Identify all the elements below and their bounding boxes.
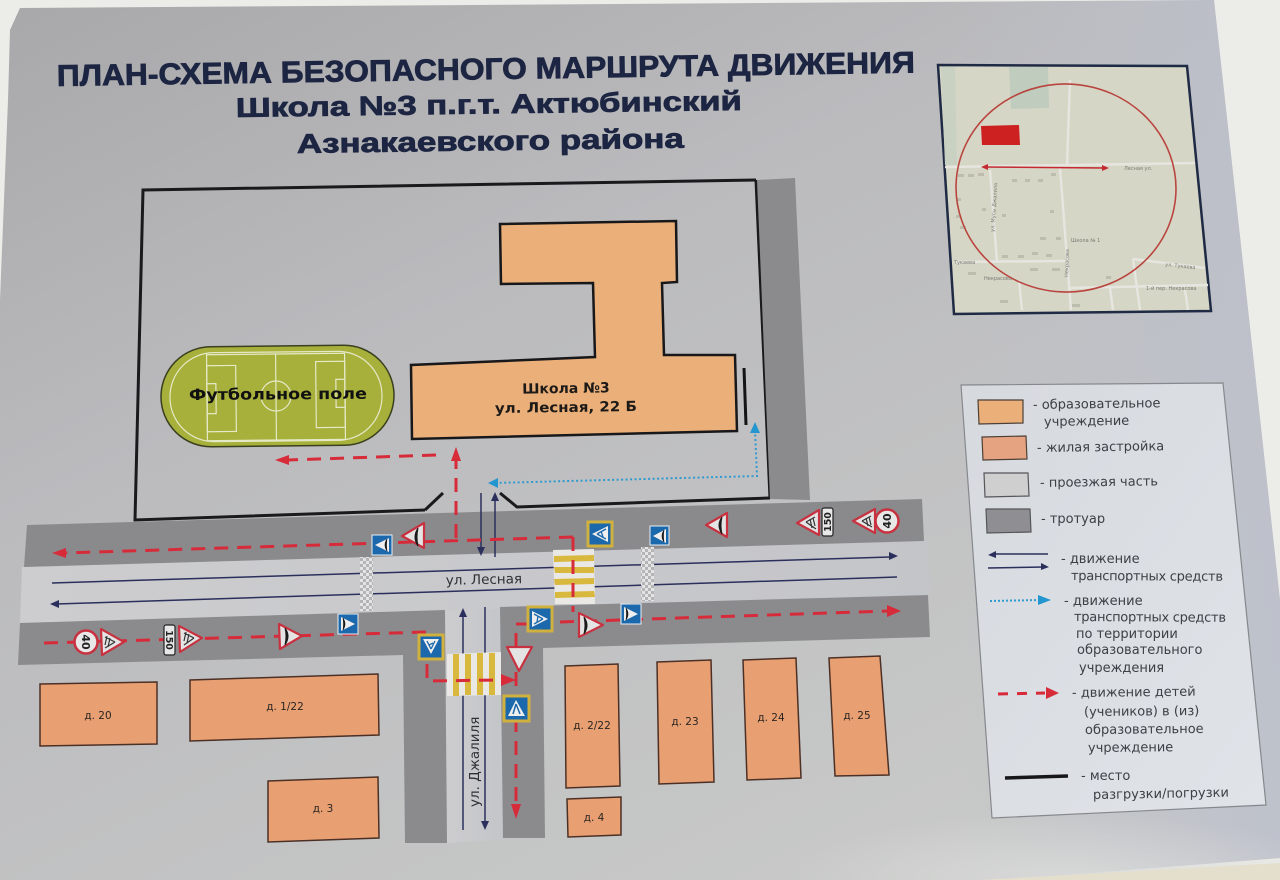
legend: educational institution: - образовательное bbox=[1033, 396, 1161, 413]
legend: children movement: образовательное bbox=[1085, 722, 1204, 738]
residential houses bbox=[40, 656, 889, 842]
route: lower right sidewalk bbox=[560, 605, 901, 622]
legend: vehicle traffic on site: - движение bbox=[1064, 594, 1143, 609]
house 1/22 bbox=[190, 674, 379, 741]
route: lower left sidewalk bbox=[44, 632, 427, 643]
football field bbox=[160, 345, 395, 447]
sign: children 150: 150 bbox=[823, 512, 834, 532]
legend: loading place: - место bbox=[1081, 769, 1130, 784]
gate inbound bbox=[477, 493, 485, 556]
legend: loading place bbox=[1005, 769, 1229, 803]
house 4: д. 4 bbox=[584, 812, 605, 824]
school territory outline bbox=[135, 180, 770, 520]
house 24 bbox=[743, 658, 801, 780]
map house marks bbox=[956, 173, 1111, 307]
street label Dzhalilya: ул. Джалиля bbox=[467, 717, 483, 807]
children route bbox=[44, 447, 901, 819]
road: ул. Джалиля bbox=[444, 604, 503, 843]
sign: blue lower east bbox=[621, 604, 641, 624]
legend: roadway: - проезжая часть bbox=[1040, 474, 1158, 491]
zebra crossing Lesnaya bbox=[553, 549, 595, 604]
house 24: д. 24 bbox=[757, 712, 785, 724]
legend: sidewalk bbox=[986, 509, 1105, 533]
Lesnaya westbound bbox=[50, 577, 897, 608]
route: crossing Dzhalilya bbox=[427, 664, 516, 686]
sign: blue lower west bbox=[338, 614, 358, 634]
Dzhalilya southbound bbox=[481, 607, 489, 830]
title line 2: Школа №3 п.г.т. Актюбинский bbox=[236, 86, 742, 123]
sign: 150 west: 150 bbox=[163, 630, 174, 650]
route arrow bbox=[981, 164, 1109, 171]
legend: vehicle traffic on site bbox=[990, 594, 1226, 676]
sign: 40 west: 40 bbox=[79, 634, 92, 650]
legend: vehicle traffic: - движение bbox=[1061, 552, 1140, 567]
inset location map bbox=[938, 65, 1211, 314]
vehicle route inside school bbox=[488, 422, 760, 488]
map labels: Школа № 1 bbox=[1071, 238, 1100, 244]
legend: vehicle traffic on site: по территории bbox=[1076, 627, 1178, 642]
house 2/22 bbox=[565, 664, 620, 788]
sign: children 150 bbox=[797, 508, 834, 536]
map labels: ул. Тукаева bbox=[1165, 262, 1196, 271]
sign: yellow crossing east bbox=[528, 607, 552, 631]
legend: vehicle traffic on site: учреждения bbox=[1079, 661, 1164, 676]
house 20: д. 20 bbox=[84, 710, 112, 722]
route: upper sidewalk to west bbox=[52, 537, 573, 558]
road signs bbox=[74, 508, 898, 721]
map labels: ул. Мусы Джалиля bbox=[990, 183, 999, 232]
legend: children movement: - движение детей bbox=[1072, 685, 1196, 701]
house 4 bbox=[567, 797, 621, 837]
building label: Школа №3 bbox=[522, 380, 610, 398]
legend: residential: - жилая застройка bbox=[1037, 439, 1164, 456]
legend: vehicle traffic on site: транспортных средств bbox=[1074, 610, 1226, 626]
bottom edge strip bbox=[980, 863, 1280, 880]
sign: blue west bbox=[372, 535, 392, 555]
house 20 bbox=[40, 682, 157, 746]
legend: loading place: разгрузки/погрузки bbox=[1093, 786, 1229, 803]
sign: uneven road lower west bbox=[279, 624, 302, 649]
house 3 bbox=[268, 777, 379, 842]
house 25 bbox=[829, 656, 889, 776]
sign: uneven road lower east bbox=[579, 613, 603, 637]
legend: residential bbox=[982, 436, 1164, 460]
loading place bbox=[744, 368, 746, 425]
sign: children 40 bbox=[853, 509, 898, 533]
legend: roadway bbox=[984, 473, 1158, 497]
house 25: д. 25 bbox=[843, 710, 871, 722]
Lesnaya eastbound bbox=[52, 552, 898, 583]
gate outbound bbox=[491, 492, 499, 557]
title line 1: ПЛАН-СХЕМА БЕЗОПАСНОГО МАРШРУТА ДВИЖЕНИЯ bbox=[57, 47, 915, 93]
map green areas bbox=[941, 67, 1049, 165]
legend: vehicle traffic: транспортных средств bbox=[1071, 569, 1223, 585]
house 23 bbox=[657, 660, 714, 784]
radius circle bbox=[951, 78, 1181, 298]
road: ул. Лесная bbox=[20, 540, 930, 623]
route: corner down Dzhalilya bbox=[511, 624, 530, 819]
house 23: д. 23 bbox=[671, 716, 699, 728]
sign: blue east side bbox=[650, 526, 669, 545]
sign: yield bbox=[507, 647, 532, 671]
zebra crossing Dzhalilya bbox=[447, 652, 501, 696]
field label: Футбольное поле bbox=[189, 385, 367, 404]
house 1/22: д. 1/22 bbox=[266, 701, 304, 713]
legend: educational institution bbox=[978, 396, 1161, 430]
vehicle traffic arrows bbox=[50, 492, 898, 830]
legend: children movement: (учеников) в (из) bbox=[1084, 704, 1199, 720]
map labels: Лесная ул. bbox=[1124, 166, 1153, 172]
pitch markings bbox=[170, 351, 382, 442]
sign: 40 west bbox=[74, 629, 124, 655]
checker crossing right bbox=[641, 547, 654, 601]
map labels: Тукаева bbox=[953, 260, 975, 266]
sign: uneven road west bbox=[402, 523, 424, 548]
legend: children movement bbox=[998, 685, 1204, 756]
map labels: Некрасова bbox=[1064, 249, 1071, 277]
legend: children movement: учреждение bbox=[1088, 740, 1173, 756]
title bbox=[57, 47, 915, 159]
legend: sidewalk: - тротуар bbox=[1041, 512, 1105, 527]
checker crossing left bbox=[360, 557, 373, 611]
map labels: Некрасова bbox=[984, 276, 1012, 282]
legend: vehicle traffic on site: образовательного bbox=[1077, 643, 1203, 658]
upper sidewalk bbox=[24, 499, 924, 567]
lower left sidewalk bbox=[18, 610, 447, 843]
Dzhalilya northbound bbox=[459, 608, 467, 830]
route: to school gate bbox=[451, 447, 461, 538]
house 3: д. 3 bbox=[313, 803, 333, 815]
street label Lesnaya: ул. Лесная bbox=[446, 571, 522, 589]
map streets bbox=[945, 80, 1208, 310]
school building: ул. Лесная, 22 Б bbox=[495, 399, 637, 417]
map labels bbox=[953, 166, 1196, 292]
sign: yellow crossing west bbox=[419, 635, 443, 659]
sign: children crossing north bbox=[588, 522, 612, 546]
route: across Lesnaya bbox=[572, 537, 574, 612]
sidewalk along school bbox=[757, 178, 810, 500]
house 2/22: д. 2/22 bbox=[573, 720, 611, 732]
map labels: 1-й пер. Некрасова bbox=[1146, 285, 1196, 292]
legend: vehicle traffic bbox=[988, 551, 1223, 585]
sign: pedestrian crossing south bbox=[504, 696, 529, 721]
title line 3: Азнакаевского района bbox=[297, 124, 685, 159]
legend panel bbox=[961, 383, 1266, 818]
route: school yard to field bbox=[275, 455, 436, 465]
legend: educational institution: учреждение bbox=[1044, 414, 1129, 430]
lower right sidewalk bbox=[500, 595, 930, 838]
sign: 150 west bbox=[163, 625, 202, 655]
sign: children 40: 40 bbox=[881, 513, 894, 529]
school building bbox=[411, 221, 737, 439]
sign: uneven road east bbox=[706, 513, 727, 537]
school marker bbox=[981, 125, 1020, 145]
